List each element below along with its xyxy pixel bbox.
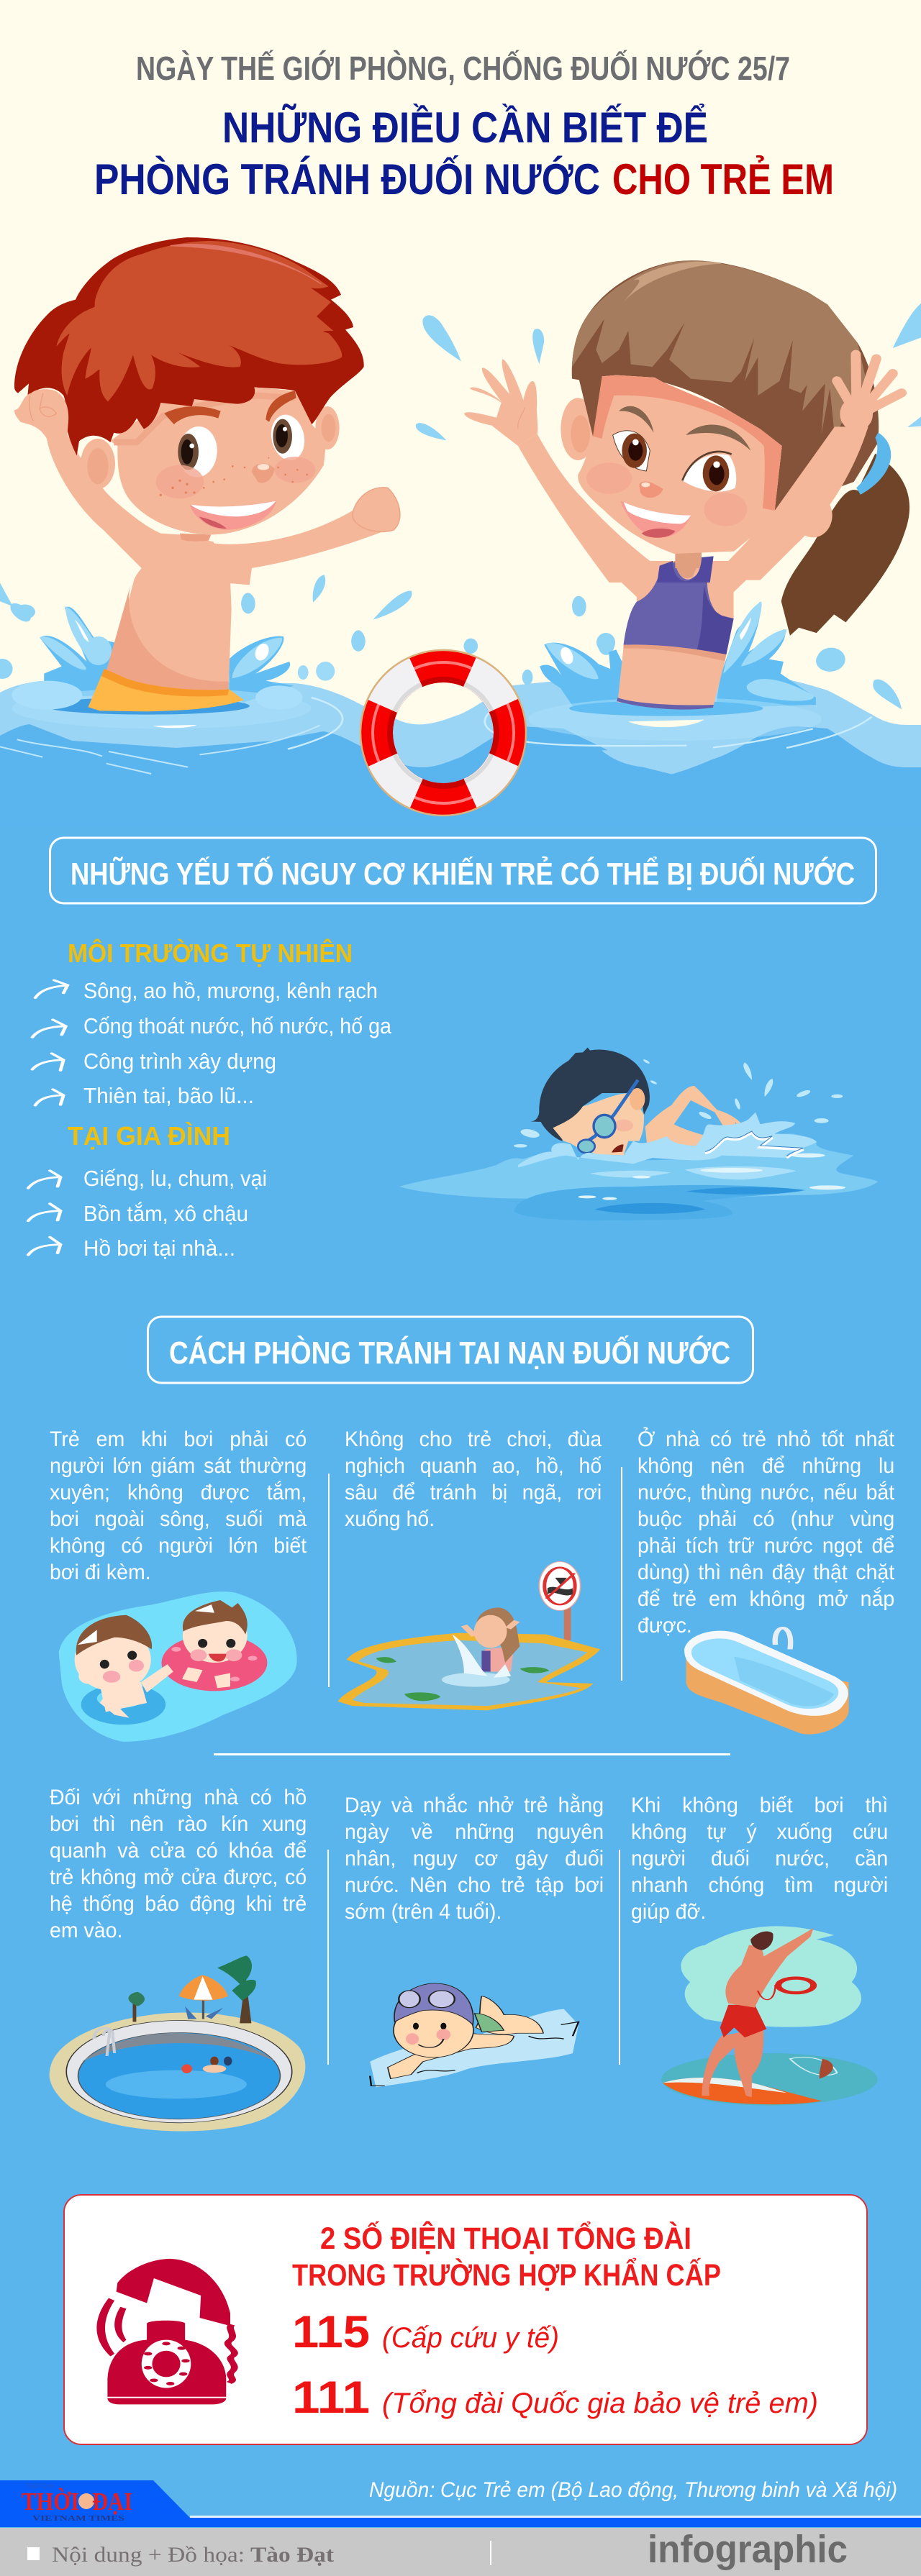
footer separator	[490, 2541, 491, 2565]
text: prevention tip 5: ngày về những nguyên	[345, 1820, 604, 1844]
girl left arm and hand	[464, 359, 660, 583]
number 111: 111	[292, 2372, 370, 2423]
hero background	[0, 0, 921, 827]
boy forward arm	[211, 511, 381, 585]
dividers	[214, 1467, 730, 2065]
logo: ĐẠI	[92, 2488, 132, 2516]
subheading: natural environment: MÔI TRƯỜNG TỰ NHIÊN	[68, 938, 353, 968]
illustration: swimming pool	[50, 1955, 305, 2132]
text: prevention tip 1: Trẻ em khi bơi phải có	[50, 1428, 307, 1451]
boy head	[14, 237, 364, 542]
boy ripples	[0, 681, 342, 774]
text: prevention tip 5: Dạy và nhắc nhở trẻ hằng	[345, 1794, 604, 1817]
text: prevention tip 3: phải tích trữ nước ngọt để	[638, 1534, 894, 1558]
title: PHÒNG TRÁNH ĐUỐI NƯỚC	[94, 155, 600, 204]
number 111: (Tổng đài Quốc gia bảo vệ trẻ em)	[382, 2388, 818, 2419]
title	[94, 104, 834, 204]
swimmer arm	[645, 1086, 746, 1151]
girl hair	[572, 260, 879, 511]
text: prevention tip 2: sâu để tránh bị ngã, rơi	[345, 1481, 602, 1504]
text: prevention tip 6: nhanh chóng tìm người	[631, 1873, 888, 1897]
girl ripples	[485, 698, 871, 775]
text: prevention tip 5: nước. Nên cho trẻ tập bơi	[345, 1873, 604, 1897]
text: prevention tip 3: Ở nhà có trẻ nhỏ tốt nhất	[638, 1428, 894, 1451]
title: CHO TRẺ EM	[612, 155, 834, 204]
footer credit: Tào Đạt	[250, 2543, 334, 2567]
boy torso	[103, 541, 232, 692]
illustration: lifeguard	[661, 1926, 878, 2106]
text: prevention tip 3: được.	[638, 1614, 692, 1638]
pool rim	[66, 2020, 292, 2123]
panel: emergency numbers	[64, 2195, 867, 2444]
subtitle: NGÀY THẾ GIỚI PHÒNG, CHỐNG ĐUỐI NƯỚC 25/7	[136, 50, 790, 87]
heading: risk factors	[50, 838, 876, 903]
text: prevention tip 3: buộc phải có (như vùng	[638, 1507, 894, 1531]
number 115	[292, 2307, 559, 2357]
text: prevention tip 1: người lớn giám sát thường	[50, 1454, 307, 1478]
text: prevention tip 1: bơi ngoài sông, suối mà	[50, 1507, 307, 1531]
right kid	[183, 1609, 248, 1663]
boy shorts	[88, 669, 244, 711]
left kid	[100, 1682, 147, 1712]
list: at home	[83, 1166, 267, 1261]
girl swimsuit	[624, 561, 734, 654]
boy face features	[176, 425, 219, 479]
text: prevention tip 1: bơi đi kèm.	[50, 1561, 151, 1584]
number 115: (Cấp cứu y tế)	[382, 2322, 559, 2354]
text: prevention tip 2: Không cho trẻ chơi, đùa	[345, 1428, 602, 1451]
boy hair	[14, 237, 364, 455]
umbrella	[202, 1999, 204, 2019]
blue ring	[81, 1684, 165, 1725]
list: natural environment	[83, 978, 392, 1108]
text: prevention tip 1: xuyên; không được tắm,	[50, 1481, 307, 1504]
logo: VIETNAM TIMES	[32, 2515, 125, 2523]
infographic wordmark: infographic	[648, 2528, 848, 2571]
subheading: at home: TẠI GIA ĐÌNH	[68, 1121, 230, 1151]
text: prevention tip 6: Khi không biết bơi thì	[631, 1794, 888, 1817]
girl right hand	[837, 355, 902, 424]
pond	[337, 1633, 600, 1710]
palms	[132, 2002, 136, 2022]
swimmers	[181, 2064, 192, 2073]
puddle	[399, 1133, 878, 1220]
list: natural environment: Sông, ao hồ, mương, kênh rạch	[83, 978, 378, 1003]
text: prevention tip 3: dùng) thì nên đậy thật chặt	[638, 1561, 894, 1584]
text: prevention tip 2: nghịch quanh ao, hồ, hố	[345, 1454, 602, 1478]
logo: THỜI	[22, 2487, 79, 2516]
swimmer ear	[630, 1087, 645, 1110]
list: at home: Giếng, lu, chum, vại	[83, 1166, 267, 1191]
list: at home: Bồn tắm, xô chậu	[83, 1201, 248, 1226]
illustration: bathtub	[684, 1628, 849, 1735]
character: boy	[0, 237, 400, 774]
heading: prevention	[148, 1317, 753, 1383]
list: natural environment: Công trình xây dựng	[83, 1049, 276, 1074]
water droplets	[0, 303, 921, 709]
list: natural environment: Cống thoát nước, hố nước, hố ga	[83, 1013, 392, 1038]
foam	[518, 1113, 817, 1167]
text: prevention tip 5	[345, 1794, 604, 1924]
text: prevention tip 1	[50, 1428, 307, 1584]
text: prevention tip 6: giúp đỡ.	[631, 1900, 706, 1924]
footer credit	[27, 2543, 334, 2567]
text: prevention tip 4: trẻ không mở cửa được, có	[50, 1865, 307, 1889]
no swimming sign	[539, 1561, 581, 1610]
text: prevention tip 6: không tự ý xuống cứu	[631, 1820, 888, 1844]
illustration: swimmer	[399, 1048, 878, 1220]
number 115: 115	[292, 2307, 370, 2357]
heading: prevention: CÁCH PHÒNG TRÁNH TAI NẠN ĐUỐI NƯỚC	[169, 1334, 730, 1371]
goggles	[584, 1080, 638, 1143]
phone panel title: 2 SỐ ĐIỆN THOẠI TỔNG ĐÀI	[320, 2220, 691, 2256]
text: prevention tip 4: Đối với những nhà có hồ	[50, 1786, 307, 1809]
girl ponytail	[781, 454, 909, 636]
text: prevention tip 6	[631, 1794, 888, 1924]
text: prevention tip 4	[50, 1786, 307, 1942]
text: prevention tip 5: sớm (trên 4 tuổi).	[345, 1900, 502, 1924]
phone panel title: TRONG TRƯỜNG HỢP KHẨN CẤP	[292, 2257, 721, 2293]
girl face features	[613, 431, 650, 471]
text: prevention tip 4: bơi thì nên rào kín xung	[50, 1812, 307, 1836]
girl right arm	[712, 426, 868, 580]
text: prevention tip 4: em vào.	[50, 1919, 122, 1942]
boy splash	[0, 593, 366, 703]
arrows	[28, 980, 68, 1255]
girl head	[561, 260, 879, 583]
text: prevention tip 2: xuống hố.	[345, 1507, 435, 1531]
boy right fist	[353, 488, 400, 531]
list: at home: Hồ bơi tại nhà...	[83, 1236, 235, 1261]
swimmer face	[553, 1093, 644, 1156]
character: girl	[463, 260, 909, 775]
illustration: kid swimming with cap	[370, 1983, 579, 2087]
icon: telephone	[96, 2259, 235, 2404]
text: prevention tip 4: hệ thống báo động khi trẻ	[50, 1892, 307, 1916]
spray droplets	[514, 1059, 843, 1148]
boy raised arm	[47, 434, 223, 568]
illustration: kids in swim rings	[59, 1591, 297, 1742]
footer credit: Nội dung + Đồ họa:	[52, 2543, 245, 2567]
text: prevention tip 4: quanh và cửa có khóa để	[50, 1839, 307, 1863]
girl torso	[599, 561, 766, 710]
number 111	[292, 2372, 818, 2423]
swimmer hair	[530, 1048, 650, 1141]
text: prevention tip 3	[638, 1427, 894, 1638]
girl	[481, 1646, 514, 1671]
life ring	[360, 650, 526, 816]
footer band	[0, 2480, 921, 2576]
phone panel title	[292, 2220, 721, 2293]
illustration: girl in pond with sign	[337, 1561, 600, 1710]
logo: TẠP CHÍ	[26, 2483, 55, 2490]
pink ring	[161, 1635, 267, 1691]
text: prevention tip 5: nhân, nguy cơ gây đuối	[345, 1847, 604, 1871]
logo	[22, 2483, 132, 2523]
text: prevention tip 2	[345, 1428, 602, 1531]
list: natural environment: Thiên tai, bão lũ...	[83, 1083, 254, 1108]
text: prevention tip 3: để trẻ em không mở nắp	[638, 1587, 894, 1611]
text: prevention tip 3: nước, thùng nước, nếu bắt	[638, 1481, 894, 1504]
source: Nguồn: Cục Trẻ em (Bộ Lao động, Thương binh và Xã hội)	[369, 2478, 897, 2502]
text: prevention tip 6: người đuối nước, cần	[631, 1847, 888, 1871]
title: NHỮNG ĐIỀU CẦN BIẾT ĐỂ	[222, 104, 708, 152]
girl splash	[463, 596, 849, 710]
girl scrunchie	[856, 432, 891, 495]
boy left fist	[14, 389, 68, 439]
water background waves	[0, 676, 921, 827]
ladder	[94, 2028, 114, 2056]
text: prevention tip 1: không có người lớn biết	[50, 1534, 307, 1558]
text: prevention tip 3: không nên để những lu	[638, 1454, 894, 1478]
